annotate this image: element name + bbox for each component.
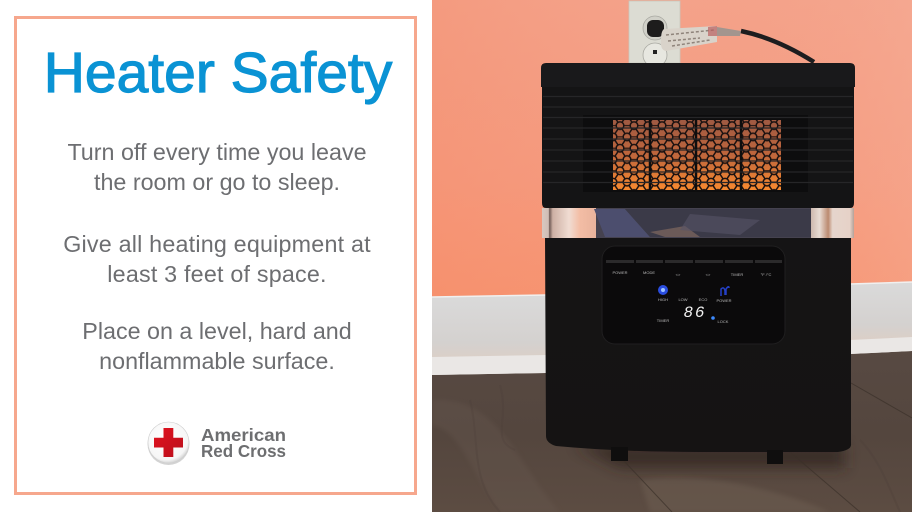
floor [432,340,912,512]
text: tip 1: Turn off every time you leave [67,139,367,165]
text: tip 3: Place on a level, hard and [82,318,352,344]
control panel: MODE [643,270,655,275]
icon: fan [658,285,668,295]
control panel: HIGH [658,297,668,302]
text: tip 1 [67,139,367,195]
heater [541,63,855,464]
text: tip 2: least 3 feet of space. [107,260,327,286]
title: Heater Safety [44,41,392,105]
chrome band [542,208,854,238]
text: tip 3 [82,318,352,374]
control panel: TIMER [657,318,669,323]
control panel: LOW [678,297,688,302]
control panel: °F /°C [761,272,771,277]
logo: American Red Cross: Red Cross [201,441,286,461]
control panel: POWER [716,298,732,303]
louvre lines [543,96,853,182]
control panel [602,246,785,344]
heating element [583,115,808,192]
baseboard left [432,295,546,375]
lower body [545,236,851,452]
upper louvre section [542,87,854,208]
wheels [611,447,628,461]
icon: flame [721,287,729,296]
logo: American Red Cross [148,422,286,465]
photo: heater against a coral wall [432,0,912,512]
panel: text card frame [14,16,417,495]
text: tip 2 [63,231,371,287]
control panel: TIMER [731,272,743,277]
text: tip 2: Give all heating equipment at [63,231,371,257]
indicator light [711,316,715,320]
text: tip 3: nonflammable surface. [99,348,335,374]
text: tip 1: the room or go to sleep. [94,168,340,194]
control panel: <> [676,272,681,277]
baseboard right [850,282,912,354]
power cord and plug label [661,26,814,62]
outlet [629,1,680,67]
wall [432,0,912,300]
control panel: LOCK [718,319,729,324]
top cap [541,63,855,87]
temperature readout: 86 [684,304,705,322]
control panel: ECO [699,297,707,302]
logo: American Red Cross: American [201,425,286,445]
control panel: POWER [612,270,628,275]
control panel: <> [706,272,711,277]
